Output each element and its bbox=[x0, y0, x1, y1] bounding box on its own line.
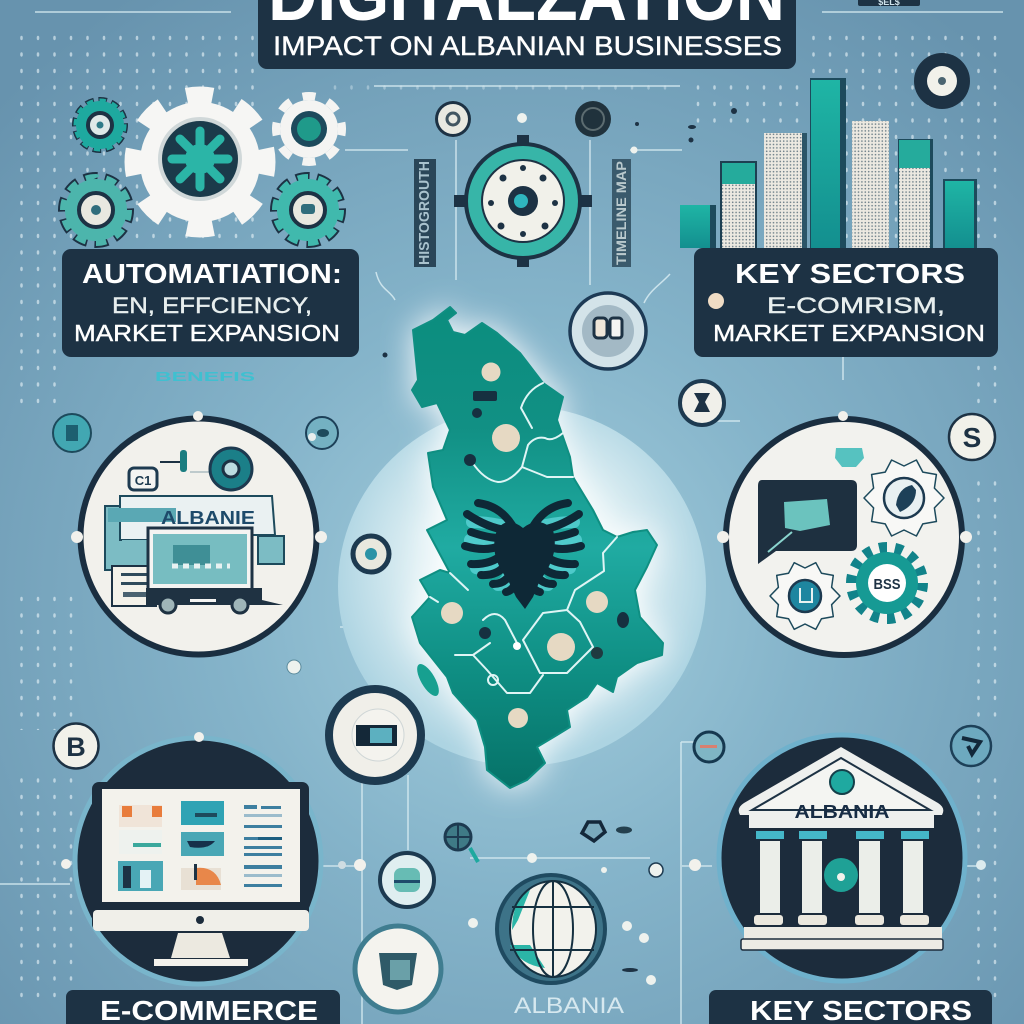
product listing lines bbox=[244, 805, 282, 887]
icon: central target dial bbox=[454, 135, 592, 267]
map markers bbox=[441, 362, 629, 728]
icon: small ring left of map bbox=[353, 536, 389, 572]
gear: bottom right teal bbox=[276, 178, 340, 242]
icon: storefront building bbox=[105, 496, 284, 570]
icon: globe bbox=[497, 875, 605, 983]
panel: e-commerce circle bbox=[61, 732, 366, 984]
icon: cross ring near map bbox=[445, 824, 478, 862]
icon: letter B badge bbox=[54, 724, 98, 768]
icon: teal tag bbox=[835, 448, 864, 467]
panel: automation: MARKET EXPANSION bbox=[74, 320, 340, 346]
icon: top centre dark badge bbox=[575, 101, 611, 137]
icon: bank building: ALBANIA bbox=[794, 802, 890, 822]
icon: pale ring bottom bbox=[355, 926, 441, 1012]
panel: key sectors: MARKET EXPANSION bbox=[713, 320, 985, 346]
scattered small markers bbox=[287, 113, 663, 985]
product thumbnails bbox=[118, 801, 224, 891]
icon: outlined gear top bbox=[864, 460, 944, 536]
gear: top right white bbox=[276, 96, 342, 162]
bar chart bbox=[680, 78, 977, 248]
panel: automation bbox=[62, 249, 359, 357]
panel: key sectors label bbox=[709, 990, 992, 1024]
icon: upper right ring badge bbox=[570, 293, 646, 369]
icon: arrow badge bbox=[951, 726, 991, 766]
icon: letter S badge bbox=[949, 414, 995, 460]
icon: top left small badge bbox=[435, 101, 471, 137]
title panel bbox=[258, 0, 796, 69]
icon: bank building bbox=[739, 747, 943, 950]
subtitle: IMPACT ON ALBANIAN BUSINESSES bbox=[273, 31, 782, 61]
gear: top left small bbox=[76, 101, 124, 149]
icon: top right knob bbox=[914, 53, 970, 109]
panel: bank circle bbox=[689, 735, 986, 981]
icon: teal ring small bbox=[380, 853, 434, 907]
gear: bottom left teal bbox=[64, 178, 128, 242]
panel: automation: AUTOMATIATION: bbox=[82, 258, 342, 289]
small top-right label bbox=[858, 0, 920, 7]
icon: note card bbox=[112, 566, 156, 606]
icon: small badge right of left circle bbox=[306, 417, 338, 449]
icon: monitor bbox=[92, 782, 309, 966]
panel: e-commerce label bbox=[66, 990, 340, 1024]
icon: teal gear BSS: BSS bbox=[874, 576, 900, 593]
gear: large central white bbox=[134, 96, 266, 228]
icon: gears cluster bbox=[64, 96, 342, 242]
icon: dark pebble bbox=[582, 822, 632, 841]
region borders bbox=[430, 383, 617, 693]
icon: outlined gear bottom bbox=[770, 563, 840, 629]
icon: teal gear BSS bbox=[854, 550, 920, 616]
icon: small teal ring near bank bbox=[694, 732, 724, 762]
icon: laptop bbox=[146, 528, 283, 613]
panel: key sectors: KEY SECTORS bbox=[735, 258, 965, 289]
map of Albania bbox=[412, 307, 663, 788]
vertical label left: HISTOGROUTH bbox=[416, 161, 433, 265]
icon: letter S badge: S bbox=[963, 422, 981, 453]
icon: upper left ring below map bbox=[329, 689, 421, 781]
icon: small widgets bbox=[129, 448, 252, 490]
label: benefits: BENEFIS bbox=[155, 369, 256, 384]
soft disc behind map bbox=[338, 406, 706, 766]
icon: teal square badge bbox=[53, 414, 91, 452]
icon: storefront building: ALBANIE bbox=[161, 508, 255, 528]
vertical label right: TIMELINE MAP bbox=[613, 161, 629, 265]
panel: key sectors bbox=[694, 248, 998, 357]
icon: eagle emblem bbox=[465, 503, 581, 609]
label: albania: ALBANIA bbox=[514, 993, 624, 1018]
icon: letter B badge: B bbox=[66, 732, 86, 762]
icon: speech bubble bbox=[758, 480, 857, 564]
panel: right circle (business icons) bbox=[717, 411, 972, 655]
map glow bbox=[412, 307, 663, 788]
icon: ring right of map bbox=[680, 381, 724, 425]
icon: small widgets: C1 bbox=[135, 473, 151, 488]
panel: key sectors: E-COMRISM, bbox=[767, 293, 945, 318]
scattered dark specks bbox=[382, 108, 737, 972]
panel: automation: EN, EFFCIENCY, bbox=[112, 293, 312, 318]
panel: left circle (automation screen) bbox=[71, 411, 327, 654]
